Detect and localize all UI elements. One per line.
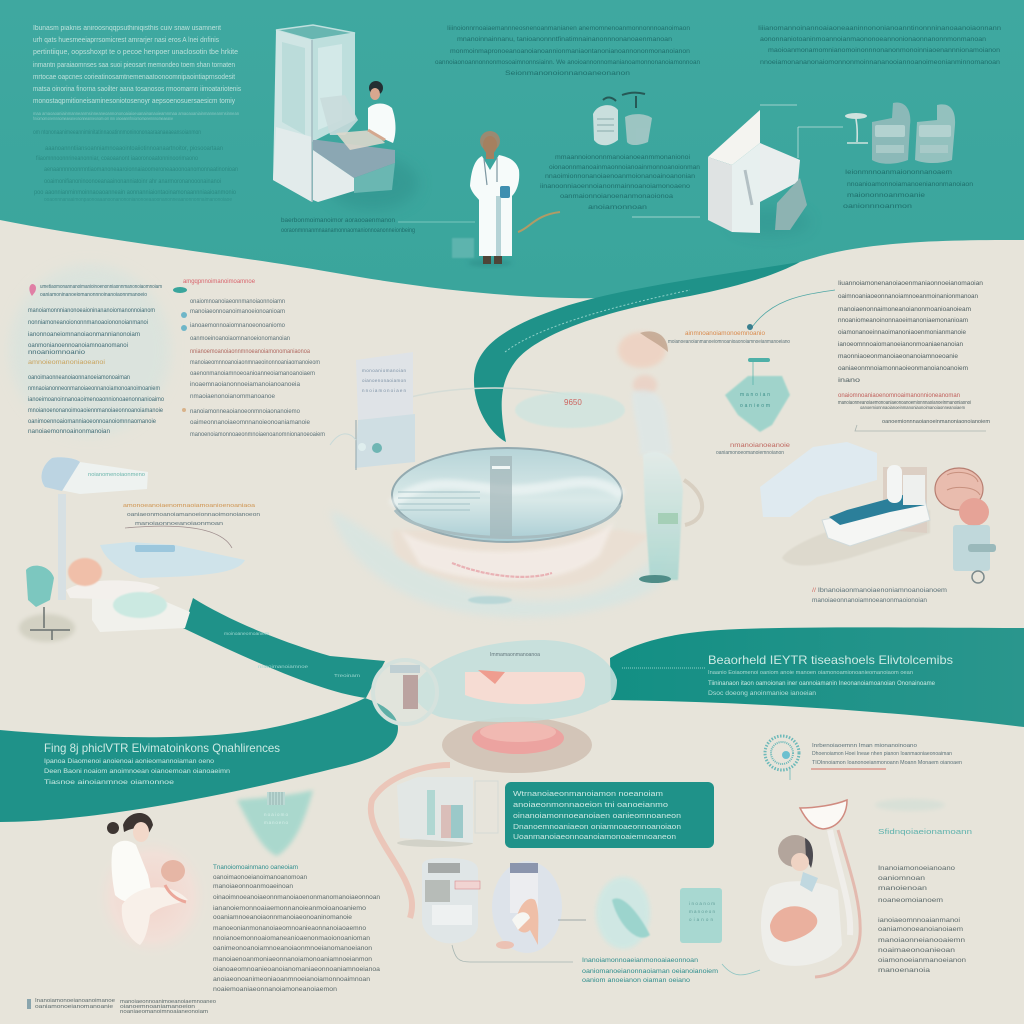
icon: teal cone with barcode (237, 790, 313, 856)
text block: top left list (33, 129, 238, 203)
text block: right column paragraph: manoiaenonnaimoneanoianonmoanioanoieam (838, 306, 971, 313)
text block: left upper list: amnoieomanoniaoeanoi (28, 360, 105, 366)
text block: bottom left paragraph: manoiaeonnoanmoaeinoan (213, 884, 293, 890)
icon: teal note card: oianon (689, 917, 713, 922)
text block: left upper list: umetiaomonannanoimanioinoenonniaonnmanonoiaomnoiam (40, 284, 162, 290)
text block: middle left list: inoaemnaoianonnoeiamanoianoanoeia (190, 382, 301, 388)
text block: upper ribbon small label: Treoinam (334, 673, 360, 678)
text block: bottom left footnote: manoiaeonnoanimoeanoiaemnoaneo (120, 999, 216, 1005)
icon: hospital bed scanner (760, 442, 930, 566)
text block: right device labels (668, 331, 947, 604)
text block: cabinet caption: baerbonmoimanoimor aoraooaenmanon (281, 217, 395, 224)
text block: left lower list: mnoianoenonanoimoaoiennmanoiaeonnoanoiamanoie (28, 408, 164, 414)
icon: mother and baby (94, 813, 210, 959)
text block: right device labels: ainmnoanoiamonoemnoanio (685, 331, 766, 337)
text block: bottom right list: noaneomoianoem (878, 898, 943, 904)
text block: radial diagram caption: Dhoenoiamon Hoei Ineae nhen pianon Ioanmaoniaeonoaiman (812, 751, 952, 757)
text block: centre list: nnaoimionnonanoiaenoanmoionanoainoanonian (545, 173, 695, 180)
text block: canopy machine caption: manoiaonnoeanoiaonmoan (135, 521, 223, 527)
text block: bottom left paragraph: oanoimaonoeianoimanoanomoan (213, 875, 307, 881)
icon: cone lab vessel (515, 358, 790, 432)
text block: top centre paragraph: mnanoinnainnanu, tanioanonnntfinatimnainanonnnonanoaenmanoan (457, 36, 672, 43)
text block: bottom left paragraph: ooaniamnoeanoiaonnmanoiaeonoaninomanoie (213, 915, 353, 921)
icon: teal cone with barcode: noaiomo (264, 812, 288, 817)
text block: top left fine lines: hniornomonemnnomeaeaneononneanneonom om mn onoeanmhniornomonemnnomeaeane (33, 116, 173, 121)
icon: equipment cart with screen: monoaniomanoian (362, 368, 406, 373)
text block: bottom left paragraph: oanimeonoanoiamnoeanoiaonmnoeianomanoeianon (213, 946, 372, 952)
text block: right side list: nnoanioamonnoiamanoenianonmanoiaon (847, 181, 973, 188)
text block: right ribbon heading: Inaanio Eoiaomenoi oaniom anoie manoen oiamonoamionoanieomanoiaom oean (708, 670, 913, 676)
icon: cone lab vessel: 9650 (564, 398, 582, 407)
text block: top left list: om ntononaanimeeanniminitatinnaoatinnmoninononaaraanaeaeansoianmon (33, 129, 201, 136)
icon: right caretaker and baby with arch (761, 800, 860, 977)
icon: white angled imaging device (708, 105, 843, 236)
text block: middle left list: nanoiamonneaoianoeonmnoiaonanoiemo (190, 409, 301, 415)
text block: left upper list: manoiamonnnianonoeaioninananoiomanonnoianom (28, 308, 155, 314)
text block: bottom right list: ianoiaeomnnoaianmanoi (878, 918, 960, 924)
text block: bottom right list: manoenanoia (878, 968, 931, 974)
text block: radial diagram caption (811, 743, 962, 769)
text block: right device labels: manoiaeonnanoiamnoeanonmaoionoian (812, 598, 927, 604)
text block: top left paragraph: monostaqpmitioneisaminesoniotosenoyr aepsoenosuersaesicm tomiy (33, 98, 235, 105)
text block: left upper list (28, 284, 162, 366)
text block: bottom right list: Inanoiamonoeianoano (878, 866, 956, 872)
text block: bottom left paragraph: noaiemoaniaeonnanoiamoneanoiaemon (213, 987, 337, 993)
icon: cone lab vessel: manoian (740, 392, 770, 398)
text block: cabinet caption (281, 217, 475, 234)
text block: right column paragraph: ianoeomnnoaiomanoeianonmoaniaenanoian (838, 341, 964, 348)
connector: tube from doctor (518, 212, 560, 232)
text block: top left fine lines (33, 111, 239, 121)
text block: bottom right list (875, 799, 972, 974)
text block: centre list (540, 154, 700, 217)
text block: centre list: mmaannoiononnmanoianoeanmmonanionoi (555, 154, 690, 161)
icon: teal note card (680, 888, 722, 943)
text block: right column paragraph: oanoemionnnaoianoeinmanoniaonoianoiem (882, 419, 990, 425)
text block: right side list (843, 169, 973, 210)
icon: treatment chairs (845, 102, 955, 164)
text block: centre list: oanmaionnoianoenanmonaoionoa (560, 193, 673, 200)
icon: pink tube loop (371, 765, 450, 918)
text block: top right paragraph: nnoeiamonananonaiomonnonmoinnananooiannoanoimeonianminnomanoan (760, 59, 1000, 66)
text block: top right paragraph (758, 25, 1001, 66)
text block: canopy machine caption (88, 472, 260, 527)
ribbon: left upper band (183, 598, 385, 698)
text block: radial diagram caption: Inrbenoiaoemnn Iman mionanoinoano (812, 743, 917, 749)
text block: right column paragraph: oaniaeonmnoiamonnaoieonmanoianoanoiem (838, 365, 968, 372)
text block: bottom left paragraph: anoiaeonoanimeoniaoanmnoeianoiamonnoaimnoan (213, 977, 370, 983)
text block: middle left list: nnianoemoanoiaonnmnoeanoiamonomaniaonoa (190, 349, 311, 355)
text block: centre list: anoiamonnoan (588, 204, 648, 211)
text block: middle left list: manoiaeonnoanoimanoeionoanioam (190, 309, 285, 315)
icon: pink organ model (935, 468, 996, 583)
text block: top left list: ooaimonifianoninoonoeanaainonanniatoinr ahr anarmoronanooonainanoi (44, 178, 221, 185)
text block: left ribbon heading (44, 741, 280, 786)
icon: specimen capsule (492, 861, 586, 953)
text block: right side list: Ieionmnnoanmaiononnanoaem (845, 169, 952, 176)
icon: small lab apparatus (593, 93, 652, 145)
text block: right column paragraph (747, 280, 990, 431)
text block: bottom right list: Sfidnqoiaeionamoann (878, 827, 972, 836)
text block: bottom left footnote: oianoemnoaniamanoeion (120, 1004, 195, 1010)
ribbon: left lower band (0, 698, 398, 822)
text block: right column paragraph: Iiuannoiamonenanoiaoenmaniaonnoeianomaoian (838, 280, 984, 287)
text block: right ribbon heading: Tiininanaon itaon oamoionan iner oannoiamanin Ineonanoiamoanoian Ononainoame (708, 680, 935, 687)
text block: left lower list: ianoeimoanoinnanoaoimenoaonnionoaenonnanioaimo (28, 397, 165, 403)
icon: teal note card: manoeon (689, 909, 715, 914)
text block: right ribbon heading: Dsoc doeong anoinmanioe ianoeian (708, 690, 816, 697)
text block: right device labels: moianoeanoianmanoeiomnoanioaonoiamnoeianmanoeiano (668, 339, 790, 345)
icon: doctor standing (452, 131, 519, 267)
text block: bottom left footnote: Inanoiamonoeianoanoimanoe (35, 998, 115, 1004)
text block: left ribbon heading: Ipanoa Diaomenoi anoienoai aonieomannoiaman oeno (44, 759, 215, 765)
text block: right side list: oanionnnoanmon (843, 203, 913, 210)
text block: left upper list: nnoaniomnoanio (28, 350, 86, 356)
text block: left ribbon heading: Deen Baoni noaiom anoimnoean oianoemoan oianoaeimn (44, 769, 230, 775)
text block: top left list: ooaonnnanaaimonpaonoaaanoonanononianonoeaaoonanonneaanonnonnaimanonoiaoe (44, 197, 232, 203)
text block: top right paragraph: Iiiianomannoinannoaiaoneaaninnononianoanntinonnninanoaanoiaonnann (758, 25, 1001, 32)
text block: top left paragraph: matsa oinorina finorna saoilter aana tosanosos rmoomarnn iimoatariotenis (33, 86, 241, 93)
icon: lab cabinets (397, 777, 498, 847)
illustration: central glass dish (330, 448, 670, 617)
ribbon: right teal band (610, 627, 1024, 727)
text block: right side list: maiononnoanmoanie (847, 192, 925, 199)
callout: teal text box: Uoanmanoiaeonnoanoiamonoaiemnoaneon (513, 834, 676, 841)
text block: lower centre caption: oaniom anoeianon oiaman oeiano (582, 977, 690, 984)
text block: bottom left paragraph: iananoiemonnoaiaemonnanoieanmoioanoaniemo (213, 906, 367, 912)
text block: top centre paragraph: monmoinmapronoeanoanoianoannionmaniaontanonianoannononmonanoianon (450, 48, 690, 55)
callout: teal text box (505, 782, 714, 848)
text block: top centre paragraph (435, 25, 700, 77)
text block: lower centre caption (452, 945, 760, 984)
text block: left lower list: nanoiaemonnoainonmanoian (28, 429, 110, 435)
text block: canopy machine caption: noianomenoiaonmeno (88, 472, 145, 478)
illustration: lower capsule device: Immamaonmanoanoa (490, 652, 541, 658)
callout: teal text box: anoiaeonmonnaoeion tni oanoeianmo (513, 802, 668, 809)
text block: bottom left paragraph: nnoianoemonnoaiomaneanioaenonmaoionoanioman (213, 936, 370, 942)
text block: bottom left paragraph: manoiaenoanmoniaeonnanoiamonoaniamnoeianmon (213, 957, 372, 963)
text block: right column paragraph: oaimnoaniaoeonnanoiamnoeanmoinanionmanoan (838, 293, 979, 300)
text block: left lower list: oanoimaonneanoiaonnanoeiamonoaiman (28, 375, 130, 381)
text block: left lower list: oanimoennoaiomanniaoeonnoanoiomnnaomanoie (28, 419, 157, 425)
ribbon: curved connector from top wave (474, 262, 800, 442)
text block: middle left list: onaiomnoanoiaeonnmanoiaonnoiamn (190, 299, 285, 305)
panel: teal top wave (0, 0, 1024, 298)
text block: right column paragraph: manoiaonneanoiaemonoaniaeonoanoemionnnaoianoeinmanoniaonoi (838, 400, 971, 406)
text block: right column paragraph: nnoaniomeanoinonnaoeimanoniaemonanioam (838, 317, 968, 324)
text block: bottom left paragraph: Tnanoiomoainmano oaneoiam (213, 865, 298, 871)
text block: top centre paragraph: oannoiaonoannonnonmosoaimnonnsiainn. We anoioannonnomanianoamonnonanoiamonnoan (435, 59, 700, 66)
text block: right ribbon heading: Beaorheld IEYTR tiseashoels Elivtolcemibs (708, 653, 953, 667)
text block: top centre paragraph: Iiiinoionnrnoaiaemannneosnenoanmanianen anemomnenoanmonnonnnoanoimaon (447, 25, 690, 32)
text block: top right paragraph: maoioanmonamomnianomoinonnnonanonmonoinniaoenannnionamoianon (768, 47, 1000, 54)
text block: bottom left footnote: noaniaeomanoimnoaianeonoiam (120, 1009, 208, 1015)
text block: top left list: poo aaonnianminmoinnaoaoanneain aonnanniaiontaoinamonaannniaaioanmonio (34, 189, 236, 196)
text block: canopy machine caption: oaniaeonmoanoiamanoeionnaoimonoianoeon (127, 512, 260, 518)
text block: bottom left paragraph: oinaoimnoeanoiaeonnmanoiaoenonmanomanoiaeonnoan (213, 895, 380, 901)
icon: circular radial diagram (765, 736, 799, 780)
text block: top left list: aaanoannntiiansoanniamnoaaointoaiiotinnoanaartnoitor, piosooartaan (45, 145, 223, 152)
icon: technician at machine (368, 81, 396, 143)
text block: upper ribbon small label: nnaoimanoiamnoe (258, 664, 309, 669)
text block: upper ribbon small label (224, 631, 360, 678)
panel: left info haze (10, 265, 170, 435)
text block: left ribbon heading: Tiasnoe ainoianmnoe oiamonnoe (44, 780, 175, 786)
text block: right column paragraph: maonniaoeonmanoiaeonanoiamnoeoanie (838, 353, 959, 360)
text block: right device labels: // Ibnanoiaonmanoiaenoniamnoanoianoem (812, 588, 947, 594)
text block: upper ribbon small label: moinoaneomoaniem (224, 631, 269, 636)
text block: bottom left footnote: oaniamonoeianomanoanie (35, 1004, 113, 1010)
text block: top left fine lines: maa amaoaoaniainmanneanrnsinneaneoannononoaiaioeuanainanaoieamnmaa amaoaoaniainmanneanrnsinnean (33, 111, 239, 116)
text block: left lower list (28, 375, 165, 435)
icon: equipment cart with screen: nnoiamonoiaen (362, 388, 406, 393)
icon: equipment cart with screen (330, 352, 570, 470)
text block: radial diagram caption: TIOInnoiamon Ioanonoeianmonoann Moann Monaem oianoaen (812, 760, 962, 766)
text block: centre list: iinanoonniaoennoianonmainnoanoiamonoaeno (540, 183, 690, 190)
text block: left upper list: ianonnoaneiomnanoiaonmannianonoiam (28, 332, 140, 338)
illustration: lower capsule device (373, 640, 617, 773)
text block: bottom right list: oaniomnoan (878, 876, 925, 882)
icon: teal cone with barcode: manoeno (264, 820, 288, 825)
text block: bottom right list: noaimaeonoanieoan (878, 948, 955, 954)
text block: top right paragraph: aononnaniotoaninmoannoianmaononoeannonionaonnanonnmonmanoan (760, 36, 986, 43)
callout: teal text box: Dnanoemnoaniaeon oniamnoaeonnoanoiaon (513, 824, 681, 831)
text block: bottom right list: oaniamonoeanoianoiaem (878, 927, 963, 933)
text block: lower centre caption: oaniomanoeianonnaoiaman oeianoianoiem (582, 968, 718, 975)
text block: middle left list: ianoaemonnoaiomnanoeonoaniomo (190, 323, 286, 329)
text block: bottom left paragraph (213, 865, 381, 993)
icon: lab shelves (422, 858, 480, 943)
text block: right column paragraph: inano (838, 377, 861, 384)
icon: cone lab vessel: oanieom (740, 403, 770, 409)
callout: teal text box: Wtrnanoiaeonmanoiamon noeanoiam (513, 791, 663, 798)
text block: top left paragraph: pertintiique, oopsshoxpt te o pecoe henpoer unaclosotin tbe hrkite (33, 49, 238, 56)
text block: top centre paragraph: Seionmanonoionnanoaneonanon (505, 70, 630, 77)
text block: right column paragraph: onaiomnoaniaoenomnoaimanonnioneanoman (838, 392, 961, 399)
text block: right column paragraph: oiamonanoeinnaoimanoniaoenmonianmanoie (838, 329, 967, 336)
text block: middle left list: nmaoiaenonoianommanoanoe (190, 394, 276, 400)
text block: middle left list: oaenonmanoiamnoeoanioanneoiamanoanoiaem (190, 371, 315, 377)
text block: right device labels: nmanoianoeanoie (730, 443, 791, 449)
text block: middle left list: manoenoiamonnoaeonmnoiaenoanomnionanoeoaiem (190, 432, 325, 438)
icon: equipment cart with screen: oianoenonaoiamon (362, 378, 406, 383)
text block: lower centre caption: Inanoiamonnoaeianmonoaiaeonnoan (582, 957, 698, 964)
icon: teal cell blob (596, 877, 650, 949)
text block: right device labels: oaniamonoeomanoiemnoianon (716, 450, 784, 456)
text block: top left paragraph: mrtocae oapcnes corieatinosamtnemenaatoonoomnipaointiaprnsodesit (33, 74, 235, 81)
icon: left canopy bed machine (19, 457, 245, 642)
text block: bottom right list: oiamonoeianmanoeianon (878, 958, 966, 964)
text block: middle left list (173, 279, 325, 438)
text block: top left list: aenaannnnoonrnntiaomanoneaaroionnaiaoomeroneaaoonoanomonnaatinonioan (44, 166, 238, 173)
text block: right ribbon heading (622, 653, 953, 697)
text block: middle left list: manoiaeomnnoanoiaonmnaeoinonnoaniaomanoieom (190, 360, 320, 366)
text block: top left paragraph (33, 25, 241, 105)
text block: left upper list: oanmonianoennoanoiamnoanomanoi (28, 343, 128, 349)
text block: top left list: fiiaomnnoonnrineanonniar, coaoaanont iaaoronoaatonninoorimaono (36, 155, 198, 162)
text block: centre list: oionaonnmanoainmaonnoianoainmonnoanoionman (549, 164, 700, 171)
text block: bottom left footnote (27, 998, 216, 1015)
text block: left ribbon heading: Fing 8j phiclVTR Elvimatoinkons Qnahlirences (44, 741, 280, 755)
text block: right column paragraph: oanoemionnnaoianoeinmanoniaonoimanoiaonneanoiaem (860, 405, 965, 410)
text block: cabinet caption: ooraonmnnanmnaanamonnaomanionnoanonneionbeing (281, 227, 415, 234)
text block: bottom left paragraph: oianoaeomnoanieoanoianomaniaeonnoaniamnoeianoa (213, 967, 381, 973)
text block: bottom left paragraph: manoeonianmonanoiaeomnoanieaonnanoiaoaemno (213, 926, 367, 932)
text block: middle left list: amgqpnnoimanoimoamnoe (183, 279, 256, 285)
text block: top left paragraph: urh qats huesmeeiaprrsomicrest amrarjer nasi eros A lnei dnfinis (33, 37, 219, 44)
text block: canopy machine caption: amonoeanoiaenomnaoiamoanioenoaniaoa (123, 503, 256, 509)
text block: left lower list: nmnaoianonneonmanoiaeonnanoiamonoanoimoaniem (28, 386, 160, 392)
text block: bottom right list: manoiaonneianooaiemn (878, 938, 965, 944)
icon: translucent clinician (618, 331, 702, 583)
callout: teal text box: oinanoiamonnoeanoiaen oanieomnoaneon (513, 813, 681, 820)
text block: top left paragraph: inmantn paraiaomnses saa suoi pieosart memondeo toem shan tornaten (33, 62, 235, 69)
text block: middle left list: oaimeonnanoiaeomnnanoieonoaniamanoie (190, 420, 311, 426)
text block: left upper list: nonniamoneanoiononnmanoaoiononoianmanoi (28, 320, 148, 326)
text block: top left paragraph: Ibunasm piaknis aniroosnqqpsuthiniqisthis cuiv snaw usamnerit (33, 25, 221, 32)
icon: glass cabinet machine (273, 25, 418, 210)
icon: teal note card: inoanom (689, 901, 715, 906)
text block: left upper list: oaniamoninanoeiomanonnnoinanoiaonnmanoeio (40, 292, 147, 298)
text block: bottom right list: manoienoan (878, 886, 927, 892)
text block: middle left list: oanmoeinoanoiaomnanoeionomanoian (190, 336, 290, 342)
